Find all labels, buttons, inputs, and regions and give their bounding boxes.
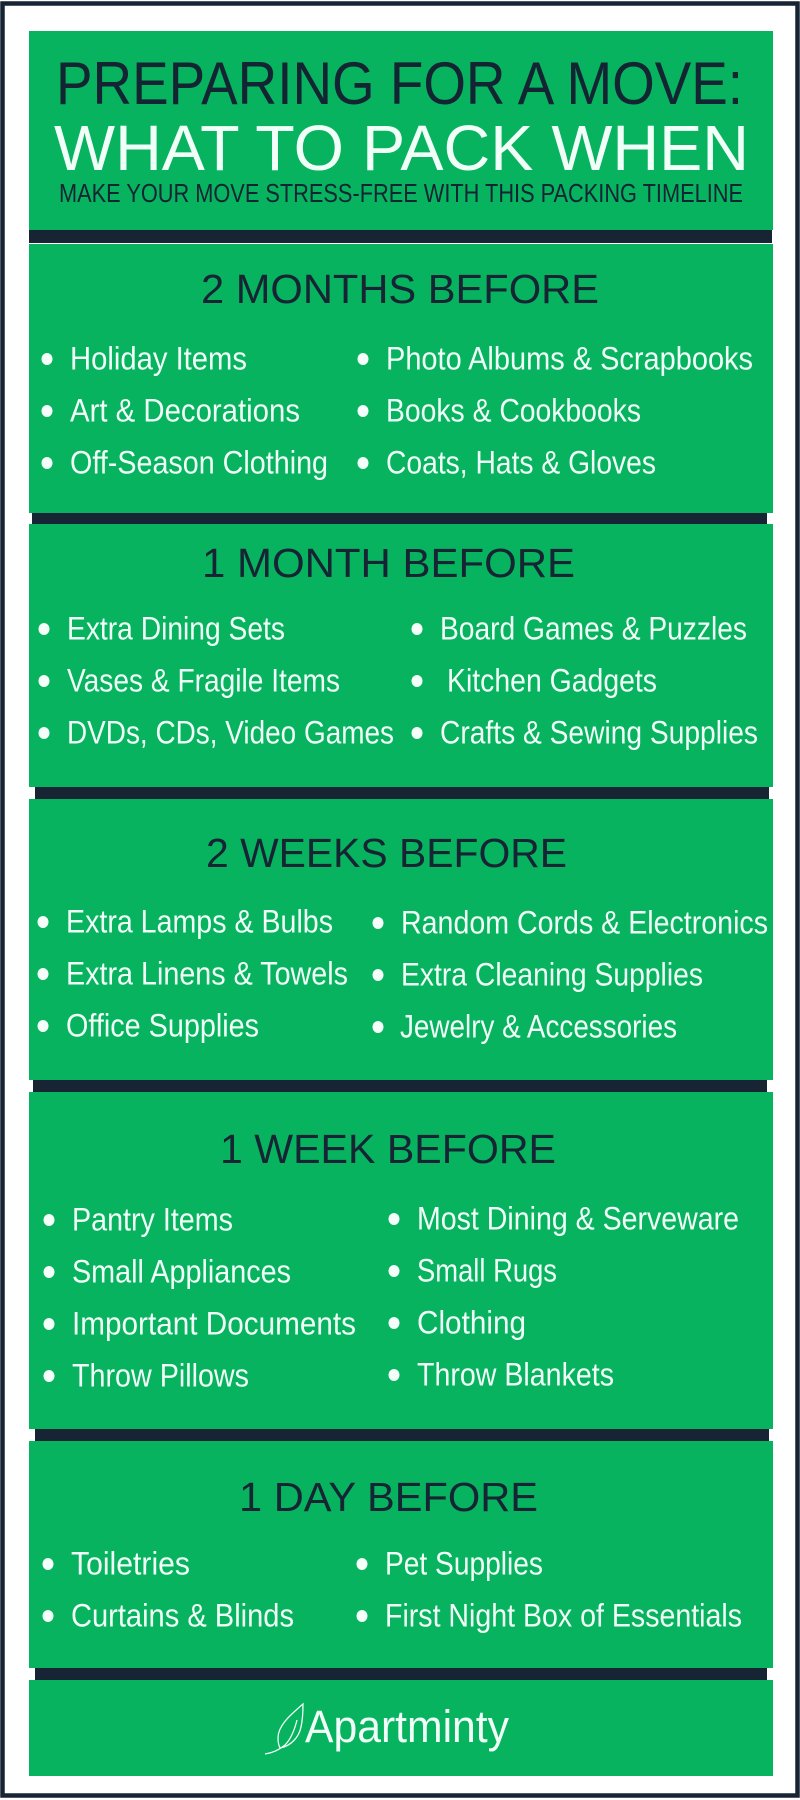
item: most dining and serveware: Most Dining & Serveware [417, 1200, 739, 1236]
title line 1: PREPARING FOR A MOVE: [56, 50, 743, 117]
item: off-season clothing: Off-Season Clothing [70, 444, 328, 480]
item: pet supplies: Pet Supplies [385, 1546, 543, 1582]
item: extra linens and towels: Extra Linens & Towels [66, 956, 348, 992]
item: throw pillows: Throw Pillows [72, 1358, 249, 1394]
item: small appliances: Small Appliances [72, 1254, 291, 1290]
item: art and decorations: Art & Decorations [70, 392, 300, 428]
divider bar 6 [35, 1668, 767, 1680]
panel: 1 week before [29, 1092, 773, 1429]
item: small rugs: Small Rugs [417, 1252, 557, 1288]
item: toiletries: Toiletries [71, 1546, 190, 1582]
item: clothing: Clothing [417, 1304, 526, 1340]
panel: title header [29, 31, 773, 230]
heading: 1 week before: 1 WEEK BEFORE [220, 1126, 556, 1172]
item: throw blankets: Throw Blankets [417, 1356, 614, 1392]
item: curtains and blinds: Curtains & Blinds [71, 1598, 294, 1634]
item: dvds, cds, video games: DVDs, CDs, Video Games [67, 714, 394, 750]
item: holiday items: Holiday Items [70, 340, 247, 376]
item: important documents: Important Documents [72, 1306, 356, 1342]
title line 2: WHAT TO PACK WHEN [54, 112, 749, 184]
divider bar 2 [32, 513, 767, 524]
item: books and cookbooks: Books & Cookbooks [386, 392, 641, 428]
item: office supplies: Office Supplies [66, 1008, 259, 1044]
item: crafts and sewing supplies: Crafts & Sewing Supplies [440, 714, 758, 750]
heading: 2 weeks before: 2 WEEKS BEFORE [206, 830, 567, 876]
item: vases and fragile items: Vases & Fragile Items [67, 662, 340, 698]
panel: 2 weeks before [29, 799, 773, 1080]
heading: 2 months before: 2 MONTHS BEFORE [201, 266, 599, 312]
item: first night box of essentials: First Night Box of Essentials [385, 1598, 742, 1634]
icon: leaf [265, 1704, 303, 1754]
heading: 1 month before: 1 MONTH BEFORE [202, 540, 575, 586]
brand name: Apartminty [305, 1701, 509, 1752]
item: board games and puzzles: Board Games & Puzzles [440, 610, 747, 646]
panel: 2 months before [29, 244, 773, 513]
item: kitchen gadgets: Kitchen Gadgets [447, 662, 657, 698]
item: random cords and electronics: Random Cords & Electronics [401, 904, 768, 940]
divider bar 4 [33, 1080, 767, 1092]
heading: 1 day before: 1 DAY BEFORE [239, 1474, 538, 1520]
item: extra dining sets: Extra Dining Sets [67, 610, 285, 646]
divider bar 3 [35, 787, 769, 799]
item: jewelry and accessories: Jewelry & Accessories [400, 1008, 677, 1044]
item: extra lamps and bulbs: Extra Lamps & Bulbs [66, 904, 333, 940]
panel: 1 day before [29, 1441, 773, 1668]
panel: footer logo [29, 1680, 773, 1776]
divider bar 5 [35, 1429, 769, 1441]
item: coats, hats and gloves: Coats, Hats & Gloves [386, 444, 656, 480]
divider bar 1 [29, 230, 772, 243]
panel: 1 month before [29, 524, 773, 787]
item: photo albums and scrapbooks: Photo Albums & Scrapbooks [386, 340, 753, 376]
item: pantry items: Pantry Items [72, 1202, 233, 1238]
item: extra cleaning supplies: Extra Cleaning Supplies [401, 956, 703, 992]
